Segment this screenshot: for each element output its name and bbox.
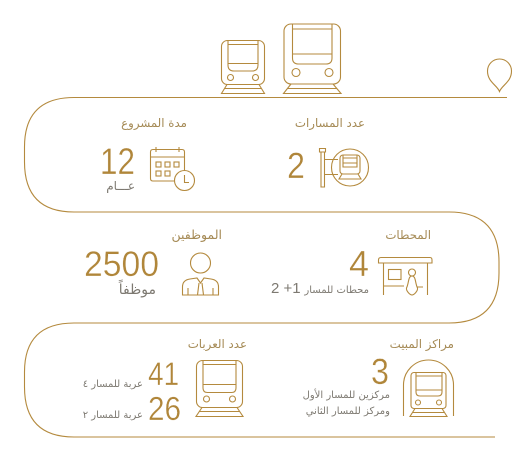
- icon: station kiosk: [378, 258, 432, 295]
- icon: location pin: [488, 59, 512, 92]
- number: 2: 2: [287, 145, 305, 186]
- number: 3: 3: [371, 351, 389, 392]
- panel: depots: [303, 337, 454, 417]
- panel: project duration: [100, 116, 194, 193]
- icon: employee: [182, 253, 218, 295]
- number: 26: 26: [148, 390, 181, 427]
- heading: tracks: عدد المسارات: [295, 116, 365, 131]
- heading: depots: مراكز المبيت: [390, 337, 454, 352]
- heading: employees: الموظفين: [171, 227, 222, 243]
- panel: stations: [271, 228, 432, 297]
- number: 4: 4: [349, 243, 369, 284]
- icon: wagon train: [196, 360, 243, 416]
- panel: employees: [84, 227, 222, 298]
- label: second track depot: ومركز للمسار الثاني: [306, 406, 390, 417]
- icon: large train: [284, 24, 341, 94]
- label: years: عـــام: [106, 179, 135, 193]
- label: stations per track: محطات للمسار: [303, 285, 369, 296]
- label: employee: موظفاً: [118, 279, 156, 298]
- number: 12: 12: [100, 141, 135, 182]
- label: wagons track 4: عربة للمسار ٤: [83, 379, 143, 390]
- icon: train in tunnel: [404, 360, 454, 416]
- icon: small train: [222, 40, 264, 94]
- number: 2500: 2500: [84, 245, 159, 284]
- panel: number of tracks: [287, 116, 368, 187]
- heading: wagons: عدد العربات: [188, 337, 247, 352]
- icon: station sign: [320, 148, 368, 187]
- number: 41: 41: [148, 356, 179, 392]
- winding route line: [24, 98, 507, 437]
- heading: stations: المحطات: [385, 228, 431, 242]
- label: first track depots: مركزين للمسار الأول: [303, 388, 390, 401]
- label: tracks 1+2: 2 +1: [271, 280, 301, 297]
- label: wagons track 2: عربة للمسار ٢: [83, 410, 143, 421]
- heading: duration: مدة المشروع: [121, 116, 187, 131]
- icon: calendar with clock: [150, 147, 194, 190]
- panel: wagons: [83, 337, 247, 427]
